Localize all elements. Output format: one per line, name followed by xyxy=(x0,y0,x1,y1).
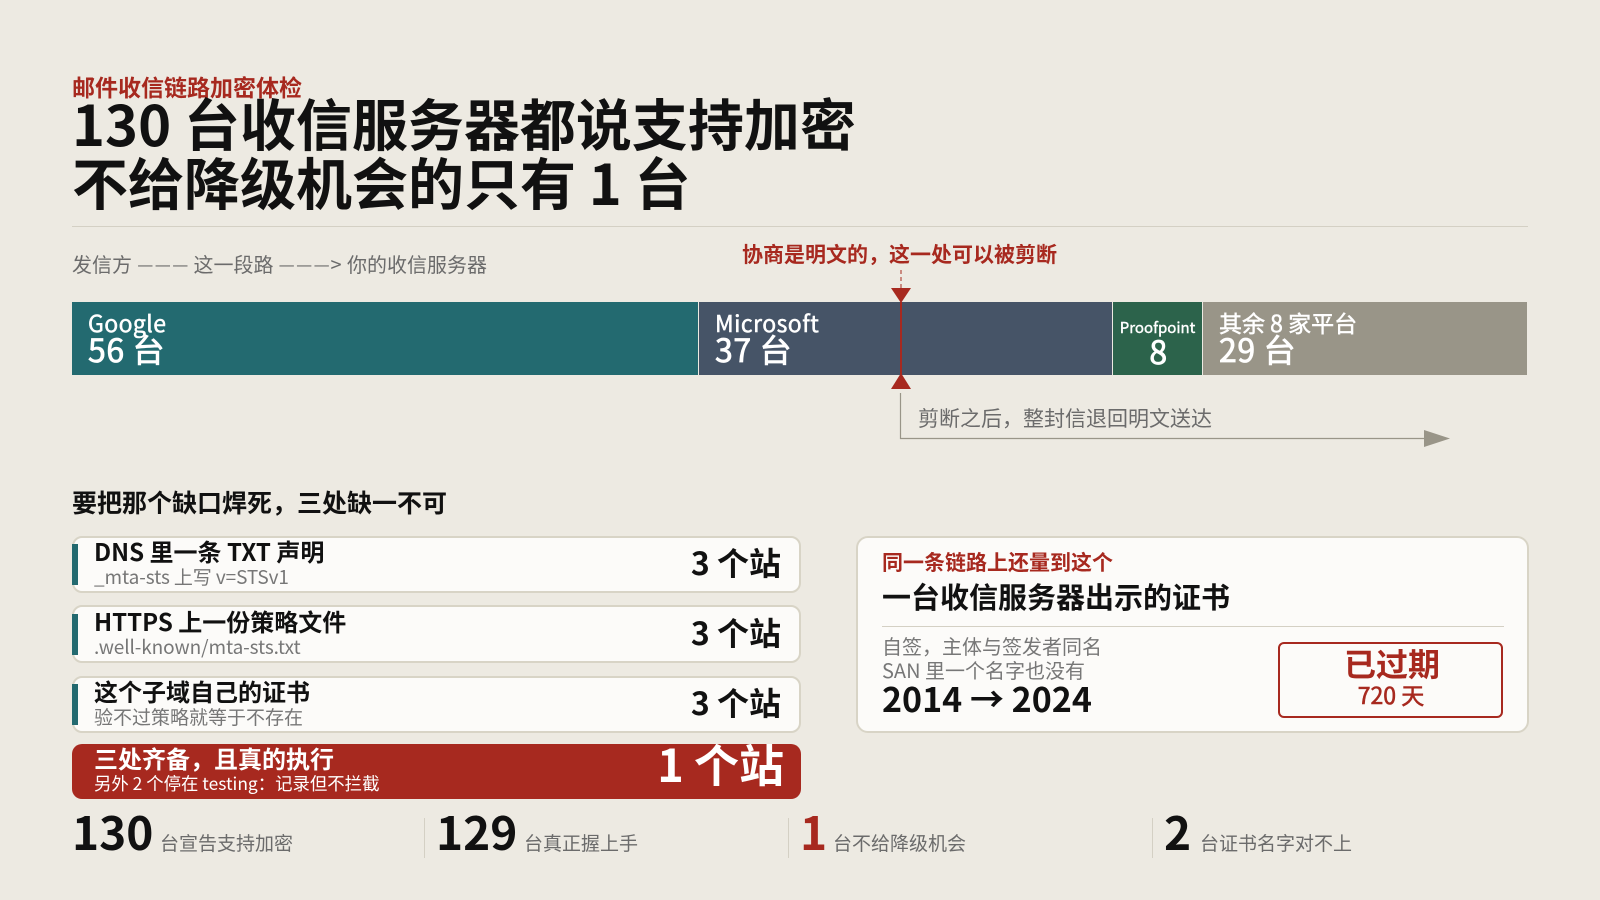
header rule xyxy=(72,226,1528,227)
stat: 129: 台真正握上手 xyxy=(524,829,638,856)
row: HTTPS policy: HTTPS 上一份策略文件 xyxy=(94,603,346,638)
stat: 130: 130 xyxy=(72,798,153,864)
card title: 一台收信服务器出示的证书 xyxy=(882,575,1230,617)
callout: negotiation is plaintext: 协商是明文的，这一处可以被剪断 xyxy=(742,239,1057,269)
requirements list xyxy=(72,533,801,799)
row: HTTPS policy: 3 个站 xyxy=(691,609,781,655)
certificate details xyxy=(882,631,1102,684)
stat: 129: 129 xyxy=(436,798,517,864)
expired badge: 已过期 xyxy=(1344,640,1440,686)
certificate details: 自签，主体与签发者同名 xyxy=(882,631,1102,660)
path caption: — xyxy=(314,251,330,277)
path caption: — xyxy=(137,251,153,277)
row: DNS TXT: 3 个站 xyxy=(691,539,781,585)
row: HTTPS policy xyxy=(72,603,801,663)
stat: 2 xyxy=(1152,798,1352,864)
expired badge: 720 天 xyxy=(1358,677,1424,711)
cut marker with downgrade arrow xyxy=(891,270,1450,447)
segment: Proofpoint xyxy=(1113,302,1202,375)
row: subdomain certificate: 3 个站 xyxy=(691,679,781,725)
title: 不给降级机会的只有 1 台 xyxy=(72,141,690,222)
fallback caption: 剪断之后，整封信退回明文送达 xyxy=(918,403,1212,433)
row: DNS TXT xyxy=(72,533,801,593)
stat: 1: 台不给降级机会 xyxy=(833,829,966,856)
title xyxy=(72,82,856,222)
stat: 130 xyxy=(72,798,293,864)
path caption: — xyxy=(296,251,312,277)
card label: 同一条链路上还量到这个 xyxy=(882,547,1113,577)
section heading: 要把那个缺口焊死，三处缺一不可 xyxy=(72,484,447,520)
row: subdomain certificate: 验不过策略就等于不存在 xyxy=(94,703,303,730)
path caption: 发信方 这一段路 > 你的收信服务器 xyxy=(72,249,487,278)
segment: other platforms xyxy=(1203,302,1527,375)
row: subdomain certificate xyxy=(72,673,801,733)
segment: Google: Google xyxy=(88,305,166,339)
stats row xyxy=(72,798,1352,864)
row: DNS TXT: _mta-sts 上写 v=STSv1 xyxy=(94,563,289,590)
segment: Microsoft: 37 台 xyxy=(715,326,792,372)
segment: other platforms: 29 台 xyxy=(1219,326,1296,372)
card rule xyxy=(882,626,1504,627)
expired badge xyxy=(1278,642,1503,718)
segment: Proofpoint: Proofpoint xyxy=(1120,317,1195,338)
segment: Microsoft xyxy=(699,302,1112,375)
path caption: — xyxy=(155,251,171,277)
segment: Microsoft: Microsoft xyxy=(715,305,819,339)
stat: 1: 1 xyxy=(800,798,827,864)
title: 130 台收信服务器都说支持加密 xyxy=(72,82,856,163)
kicker: 邮件收信链路加密体检 xyxy=(72,69,302,103)
segment: Google xyxy=(72,302,698,375)
stat: 2: 台证书名字对不上 xyxy=(1200,829,1352,856)
stat: 2: 2 xyxy=(1164,798,1191,864)
validity years: 2014 → 2024 xyxy=(882,673,1092,722)
path caption: — xyxy=(172,251,188,277)
row: DNS TXT: DNS 里一条 TXT 声明 xyxy=(94,533,324,568)
row: subdomain certificate: 这个子域自己的证书 xyxy=(94,673,310,708)
certificate details: SAN 里一个名字也没有 xyxy=(882,655,1085,684)
path caption: — xyxy=(279,251,295,277)
segment: other platforms: 其余 8 家平台 xyxy=(1219,305,1357,339)
segment: Google: 56 台 xyxy=(88,326,165,372)
row: enforced result xyxy=(72,744,801,799)
row: HTTPS policy: .well-known/mta-sts.txt xyxy=(94,633,301,660)
segment: Proofpoint: 8 xyxy=(1149,328,1168,374)
row: enforced result: 另外 2 个停在 testing：记录但不拦截 xyxy=(94,771,379,796)
stat: 130: 台宣告支持加密 xyxy=(160,829,293,856)
stacked bar: server share xyxy=(72,302,1527,375)
stat: 129 xyxy=(424,798,638,864)
stat: 1 xyxy=(788,798,966,864)
header xyxy=(72,69,1528,227)
panel: certificate xyxy=(856,536,1529,733)
